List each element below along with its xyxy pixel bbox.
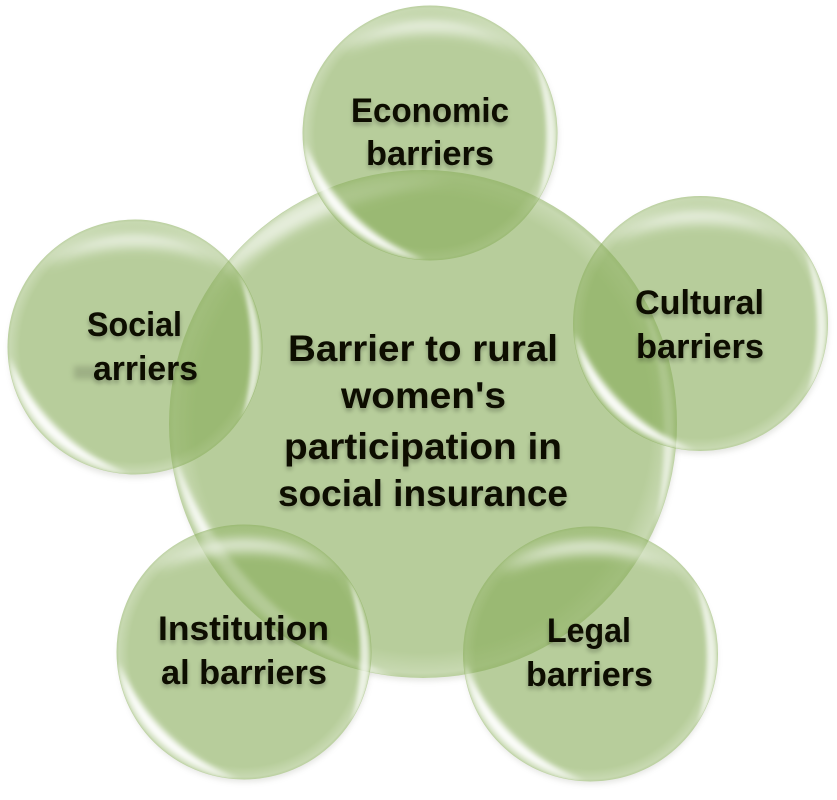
label: economic barriers bbox=[351, 92, 509, 173]
heading: centre label: participation in bbox=[284, 426, 562, 467]
label: social barriers: Social bbox=[87, 306, 182, 344]
label: institutional barriers: Institution bbox=[158, 610, 329, 648]
label: cultural barriers: Cultural bbox=[635, 284, 764, 322]
panel: central circle bbox=[169, 170, 677, 680]
label: institutional barriers bbox=[158, 610, 329, 692]
circle: social barriers bbox=[8, 220, 262, 475]
heading: centre label: Barrier to rural bbox=[288, 328, 558, 369]
circle: economic barriers bbox=[302, 6, 558, 261]
label: economic barriers: Economic bbox=[351, 92, 509, 130]
label: legal barriers: Legal bbox=[547, 612, 631, 650]
label: legal barriers: barriers bbox=[526, 656, 653, 694]
label: social barriers: arriers bbox=[93, 350, 198, 388]
label: legal barriers bbox=[526, 612, 653, 694]
label: cultural barriers: barriers bbox=[636, 328, 764, 366]
circle: cultural barriers bbox=[573, 196, 828, 452]
circle: legal barriers bbox=[463, 526, 718, 782]
heading: centre label: women's bbox=[340, 375, 506, 416]
label: economic barriers: barriers bbox=[366, 135, 494, 173]
label: institutional barriers: al barriers bbox=[161, 654, 327, 692]
label: social barriers bbox=[87, 306, 198, 388]
label: cultural barriers bbox=[635, 284, 764, 366]
circle: institutional barriers bbox=[116, 524, 372, 780]
heading: centre label bbox=[278, 328, 568, 514]
heading: centre label: social insurance bbox=[278, 473, 568, 514]
